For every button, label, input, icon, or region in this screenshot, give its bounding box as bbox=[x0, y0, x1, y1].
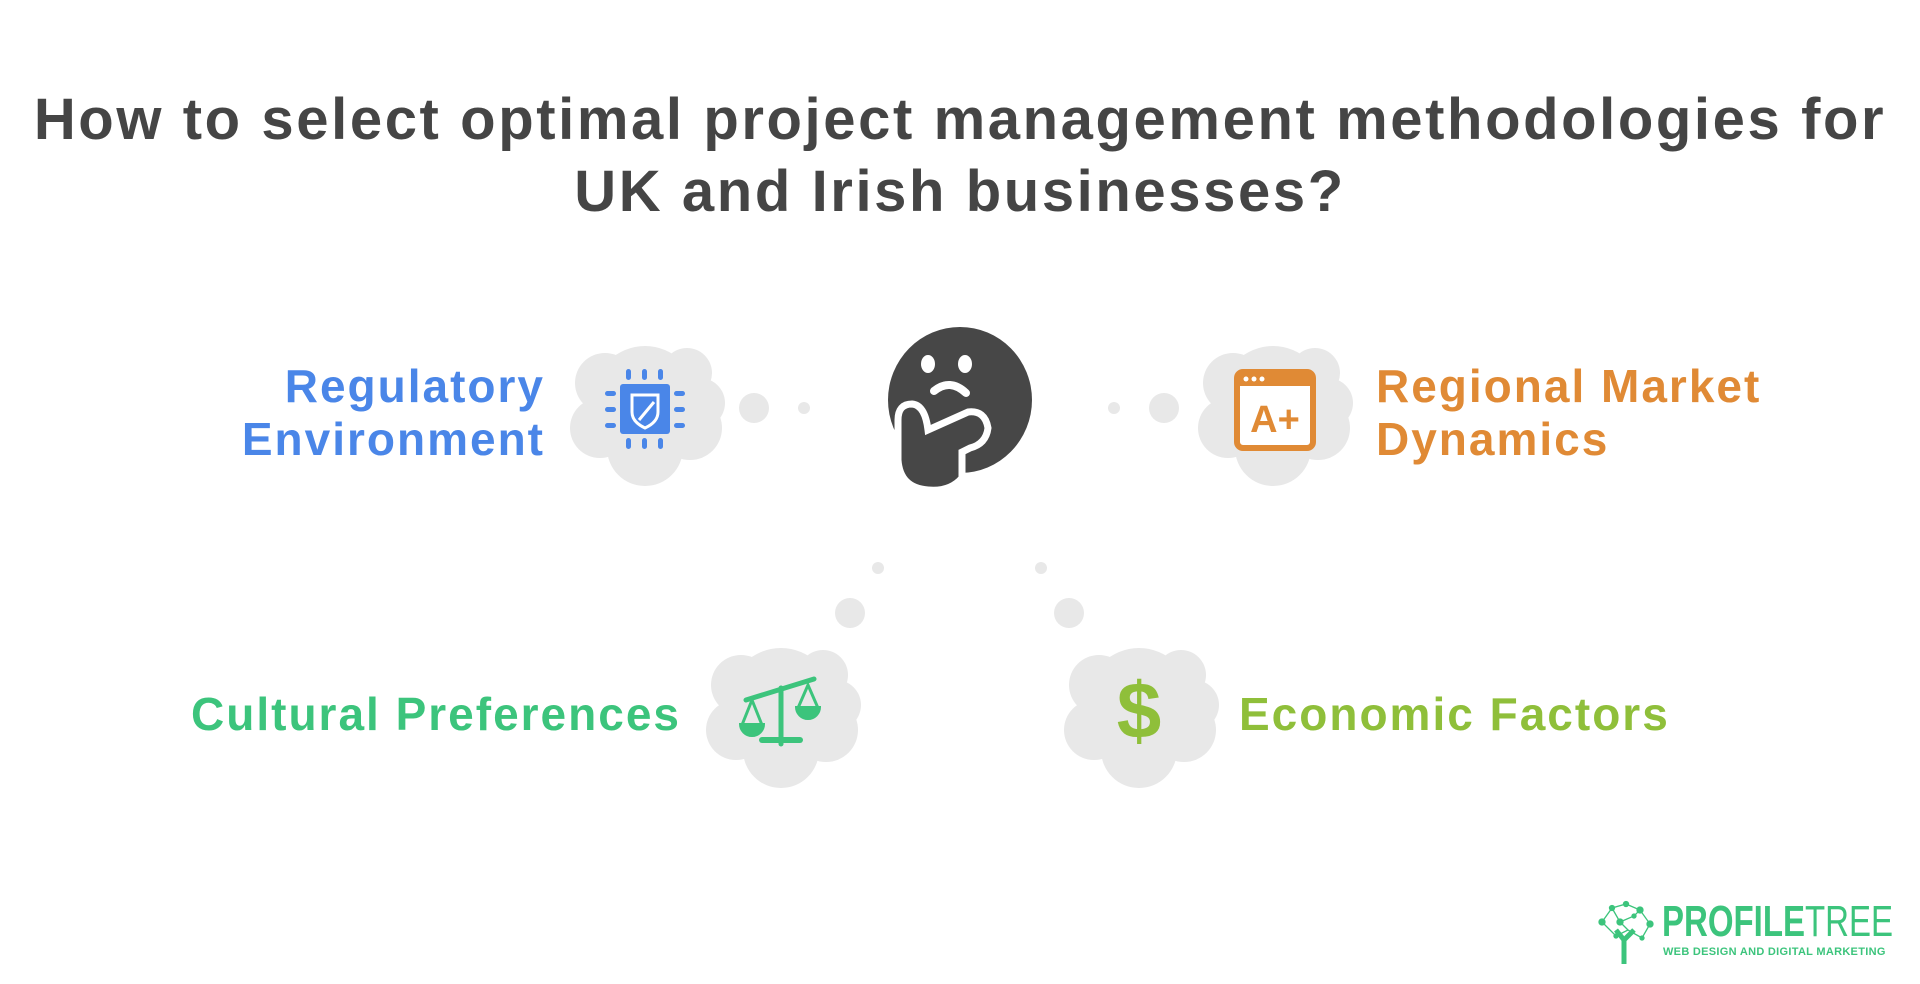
icon: economic dollar cloud bbox=[1064, 648, 1219, 788]
label: Regulatory Environment bbox=[242, 360, 545, 465]
title: How to select optimal project management methodologies for bbox=[34, 87, 1886, 152]
title: UK and Irish businesses? bbox=[574, 159, 1346, 224]
icon: regulatory chip cloud bbox=[570, 346, 725, 486]
label: Regional Market Dynamics: Dynamics bbox=[1376, 413, 1609, 465]
logo: ProfileTree: WEB DESIGN AND DIGITAL MARKETING bbox=[1663, 946, 1886, 958]
icon: regional A+ cloud bbox=[1198, 346, 1353, 486]
logo: ProfileTree bbox=[1598, 897, 1893, 964]
title bbox=[34, 87, 1886, 224]
icon: cultural scales cloud bbox=[706, 648, 861, 788]
label: Regional Market Dynamics: Regional Market bbox=[1376, 360, 1761, 412]
label: Economic Factors: Economic Factors bbox=[1239, 688, 1670, 740]
label: Regulatory Environment: Regulatory bbox=[285, 360, 545, 412]
label: Cultural Preferences: Cultural Preferences bbox=[191, 688, 681, 740]
icon: economic dollar cloud: $ bbox=[1117, 666, 1161, 755]
label: Regulatory Environment: Environment bbox=[242, 413, 545, 465]
logo: ProfileTree: PROFILETREE bbox=[1662, 897, 1893, 946]
icon: regional A+ cloud: A+ bbox=[1250, 399, 1300, 441]
thought dots bbox=[739, 393, 1179, 628]
label: Regional Market Dynamics bbox=[1376, 360, 1761, 465]
icon: thinking face bbox=[888, 327, 1032, 490]
